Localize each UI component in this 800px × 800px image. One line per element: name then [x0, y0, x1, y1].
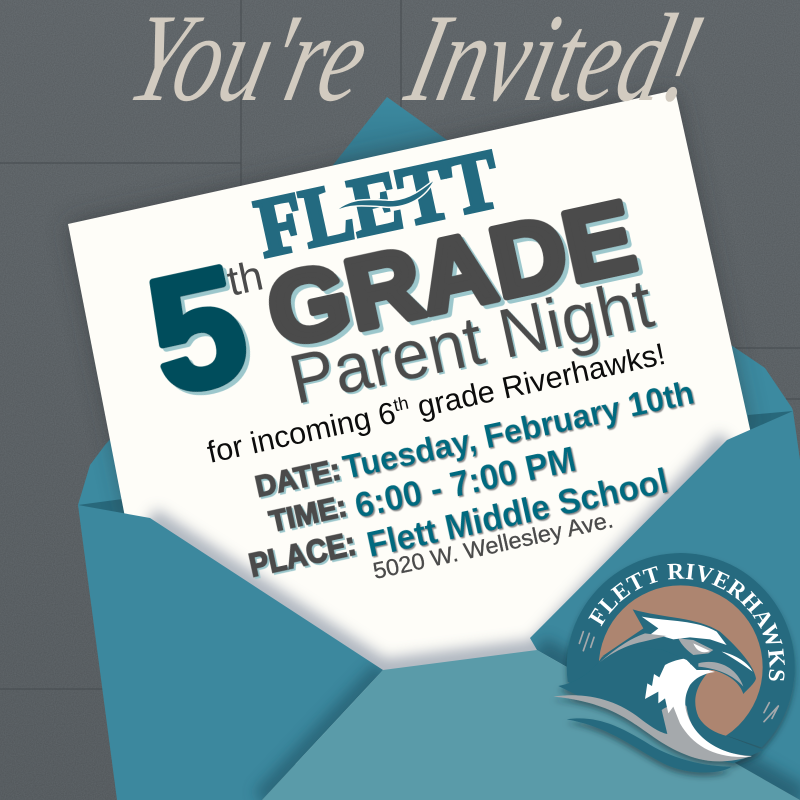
event details: date: Tuesday, February 10th [340, 373, 697, 486]
logo hawk eye [678, 638, 713, 655]
logo lower wave [567, 718, 732, 773]
subheading: for incoming 6th grade Riverhawks!: grade Riverhawks! [406, 337, 668, 426]
event details: date [252, 373, 697, 504]
event details: time [266, 440, 580, 539]
envelope right front flap [530, 411, 800, 800]
logo grey swoosh [553, 695, 752, 761]
logo: Flett Riverhawks badge [554, 553, 798, 780]
event details: time: TIME: [266, 490, 350, 539]
event details: time: 6:00 - 7:00 PM [351, 440, 580, 526]
logo tan circle [599, 585, 763, 749]
logo hawk beak [698, 652, 753, 687]
logo wave body [558, 635, 763, 763]
logo ring [567, 553, 795, 747]
heading: Parent Night: Parent Night [283, 264, 660, 419]
logo hawk grey feather [597, 633, 667, 665]
envelope bottom front flap [262, 650, 800, 800]
heading: th superscript: th [223, 251, 267, 305]
paper shadow on background [68, 90, 748, 520]
subheading: for incoming 6th grade Riverhawks!: for incoming 6 [204, 396, 399, 470]
heading: numeral 5: 5 [133, 231, 262, 429]
event details: place: PLACE: [246, 525, 359, 584]
logo hawk white brow [642, 617, 727, 645]
title: You're Invited! [117, 0, 716, 128]
address: 5020 W. Wellesley Ave. [371, 506, 615, 584]
subheading: for incoming 6th grade Riverhawks!: th [391, 393, 410, 415]
envelope back flaps [78, 97, 793, 520]
heading: GRADE: GRADE [258, 180, 644, 368]
logo arc text: FLETT RIVERHAWKS [588, 564, 785, 681]
invitation paper [68, 92, 750, 764]
logo hawk head [602, 609, 756, 694]
logo white crest [645, 657, 752, 757]
logo speed marks [579, 632, 778, 722]
event details: date: DATE: [252, 453, 344, 504]
envelope left front flap [78, 505, 383, 800]
event details: place: Flett Middle School [363, 461, 672, 565]
event details: place [246, 461, 672, 584]
heading: FLETT wordmark: FLETT [248, 133, 507, 276]
